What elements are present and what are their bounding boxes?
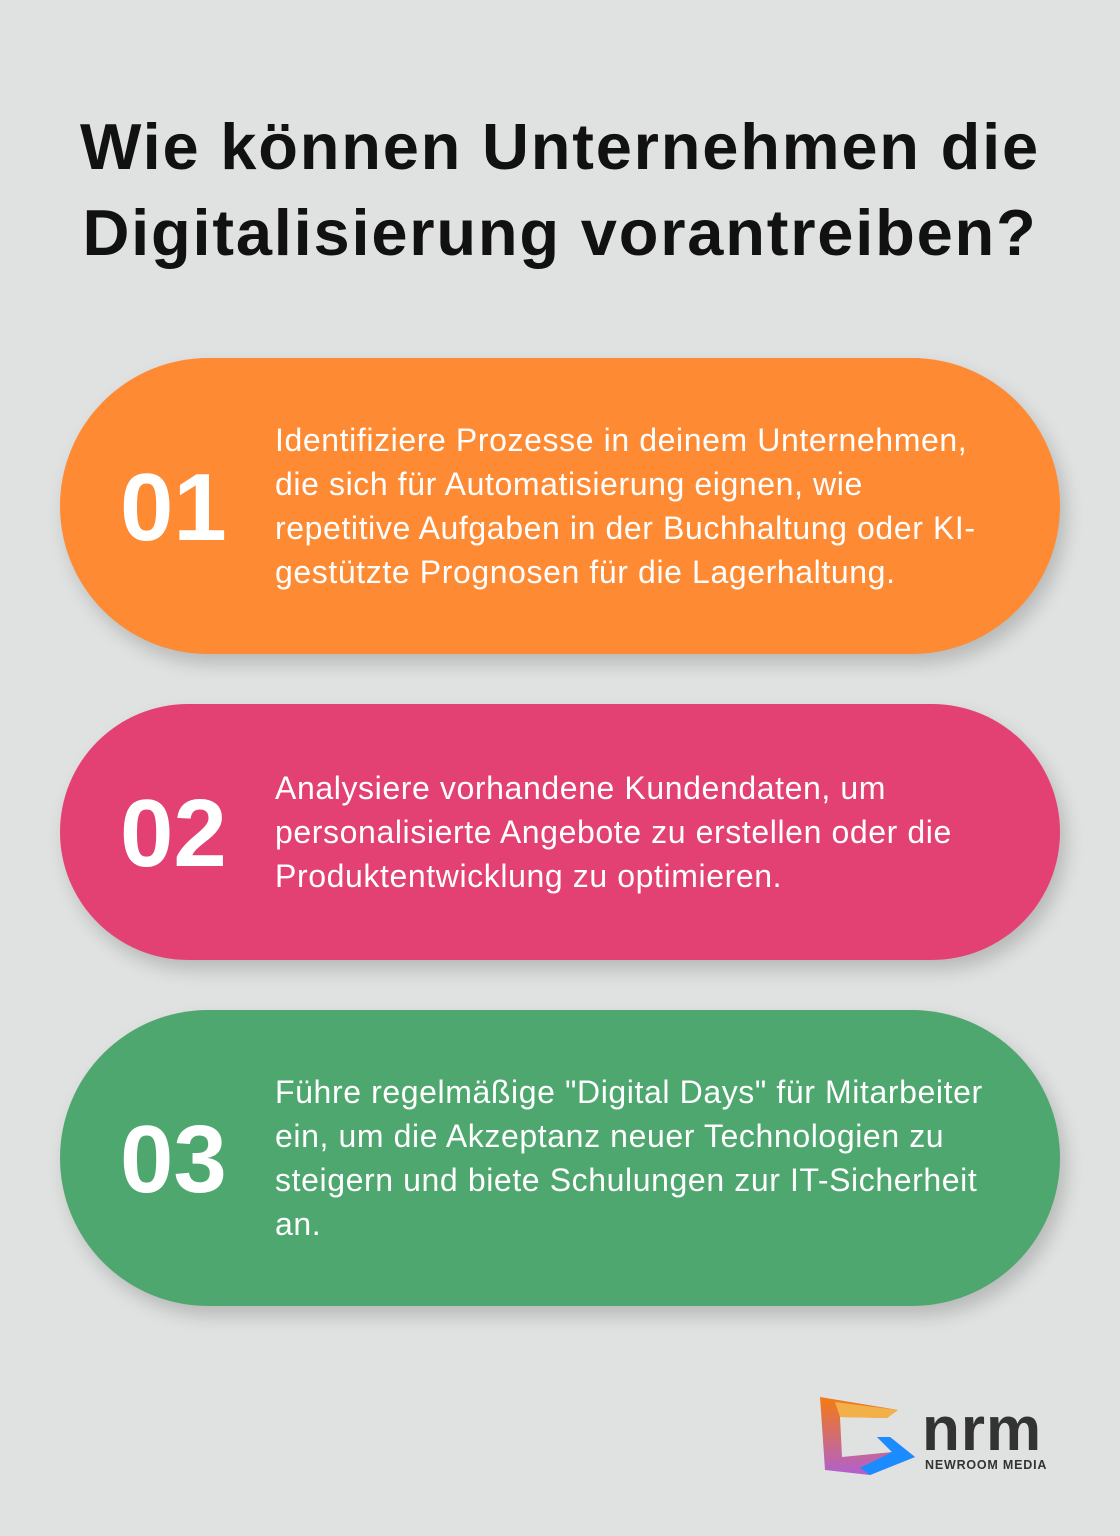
text 03: steigern und biete Schulungen zur IT-Sicherheit — [275, 1162, 977, 1198]
text 03: an. — [275, 1206, 321, 1242]
number 02: 02 — [120, 780, 227, 887]
logo — [820, 1395, 1047, 1475]
text 03 — [275, 1074, 983, 1242]
panel: step 03 — [60, 1010, 1060, 1306]
text 02: personalisierte Angebote zu erstellen oder die — [275, 814, 952, 850]
logo text: NEWROOM MEDIA — [925, 1458, 1047, 1472]
text 03: Führe regelmäßige "Digital Days" für Mitarbeiter — [275, 1074, 983, 1110]
title: Digitalisierung vorantreiben? — [82, 196, 1038, 269]
text 02: Analysiere vorhandene Kundendaten, um — [275, 770, 886, 806]
text 03: ein, um die Akzeptanz neuer Technologien zu — [275, 1118, 944, 1154]
text 01: gestützte Prognosen für die Lagerhaltung. — [275, 554, 896, 590]
number 01: 01 — [120, 454, 227, 561]
logo mark — [820, 1397, 915, 1475]
panel: step 02 — [60, 704, 1060, 960]
text 01: die sich für Automatisierung eignen, wie — [275, 466, 863, 502]
number 03: 03 — [120, 1106, 227, 1213]
title: Wie können Unternehmen die — [80, 110, 1040, 183]
logo text: nrm — [922, 1395, 1042, 1464]
title — [80, 110, 1040, 269]
text 02 — [275, 770, 952, 894]
panel: step 01 — [60, 358, 1060, 654]
text 01 — [275, 422, 976, 590]
text 02: Produktentwicklung zu optimieren. — [275, 858, 782, 894]
text 01: Identifiziere Prozesse in deinem Unternehmen, — [275, 422, 967, 458]
text 01: repetitive Aufgaben in der Buchhaltung oder KI- — [275, 510, 976, 546]
